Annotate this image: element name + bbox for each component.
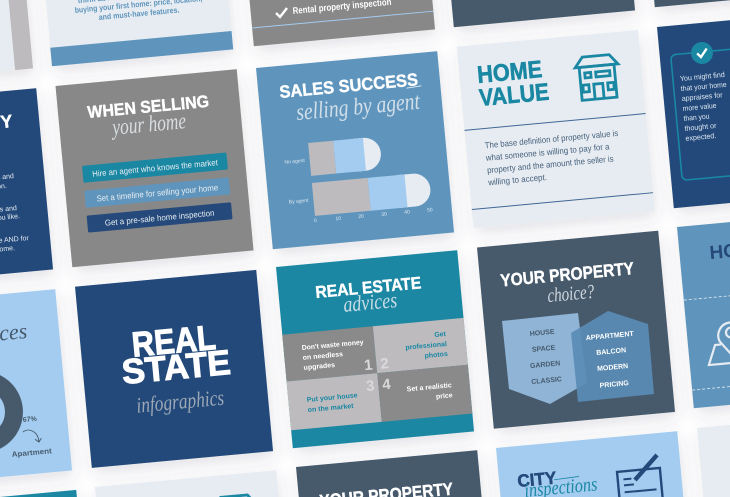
text block: appraisal: that your home <box>680 80 727 93</box>
house shape: right list: PRICING <box>599 380 630 390</box>
panel: top rental inspection card <box>237 0 435 46</box>
bar chart: 30 <box>381 212 387 218</box>
panel: right navy appraisal card <box>657 10 730 208</box>
bar chart: 0 <box>314 218 317 224</box>
house shape: right list: BALCON <box>596 347 626 357</box>
text: tip 1: Don't waste money <box>302 339 364 352</box>
text: tip 1 <box>302 339 366 372</box>
text block: appraisal: thought or <box>684 121 717 133</box>
panel: top cropped first-home card <box>35 0 233 66</box>
icon: house <box>574 54 621 101</box>
heading <box>476 56 550 112</box>
bar chart: No agent <box>284 158 306 166</box>
text block: first home advice: and must-have features. <box>98 6 180 22</box>
text: tip 1: upgrades <box>303 362 335 372</box>
button: pre-sale inspection: Get a pre-sale home inspection <box>104 208 215 228</box>
text block: appraisal: than you <box>683 112 710 123</box>
panel: home value <box>457 30 655 228</box>
icon: check badge <box>690 41 714 65</box>
button: set a timeline <box>84 177 230 208</box>
panel: bottom-right light card <box>697 411 730 497</box>
panel: top-right slate card <box>638 0 730 7</box>
title: STATE <box>120 343 232 392</box>
heading: REAL ESTATE <box>315 273 422 302</box>
label: 67%: 67% <box>22 416 38 424</box>
text block: appraisal: more value <box>682 101 717 113</box>
text: tip 2: Get <box>434 331 447 339</box>
text block: definition: what someone is willing to pay for a <box>485 141 610 163</box>
panel: your property choice <box>477 231 675 429</box>
bar chart: 10 <box>335 216 342 222</box>
panel: city inspections <box>496 431 694 497</box>
heading: SALES SUCCESS <box>278 69 419 102</box>
panel: top slate card <box>437 0 635 27</box>
bar chart: By agent <box>289 198 309 206</box>
house shape: left list: HOUSE <box>529 329 555 338</box>
numbers: 2 <box>380 355 390 373</box>
panel: real state infographics cover <box>75 270 273 468</box>
panel: right location card <box>677 210 730 408</box>
house shape: right list <box>569 307 655 402</box>
heading: CITY <box>517 467 558 491</box>
text: tip 3 <box>307 392 359 414</box>
script subtitle: infographics <box>135 385 225 418</box>
bar chart: 20 <box>358 214 364 220</box>
house shape: right list: MODERN <box>597 363 629 373</box>
text block: definition <box>483 128 622 187</box>
text: tip 4: Set a realistic <box>406 382 452 393</box>
button: hire an agent: Hire an agent who knows the market <box>92 157 219 179</box>
title: REAL <box>130 318 217 365</box>
arrow <box>23 429 42 443</box>
text block: appraisal: appraises for <box>681 90 723 103</box>
icon: house <box>213 494 259 497</box>
panel: bottom your property card <box>296 450 494 497</box>
numbers: 4 <box>382 376 392 394</box>
panel: sales success <box>256 51 454 249</box>
numbers: 1 <box>363 357 373 374</box>
text block: appraisal: You might find <box>679 70 725 83</box>
text: tip 3: Put your house <box>307 392 358 404</box>
heading: HOME <box>476 56 543 89</box>
text block: first home advice <box>73 0 204 24</box>
panel: top-left cropped card <box>0 0 33 85</box>
house shape: left list: CLASSIC <box>531 376 562 386</box>
text block: appraisal <box>679 70 730 143</box>
text: tip 2: professional <box>405 341 447 352</box>
bar chart: 50 <box>427 207 433 214</box>
text block: body fragments <box>0 172 31 256</box>
quadrant grid <box>282 318 472 430</box>
heading: YOUR PROPERTY <box>500 258 635 290</box>
button: set a timeline: Set a timeline for selling your home <box>96 182 219 203</box>
script subtitle: your home <box>110 108 187 140</box>
house shape: left list <box>502 313 589 408</box>
text block: appraisal: expected. <box>685 131 717 143</box>
label: apartment: Apartment <box>11 446 53 459</box>
text: tip 4 <box>406 382 453 403</box>
text: tip 3: on the market <box>307 403 355 414</box>
house shape: left list: GARDEN <box>530 360 561 370</box>
bar chart: 40 <box>404 209 410 216</box>
text block: definition: willing to accept. <box>487 172 547 187</box>
script subtitle: advices <box>342 287 398 317</box>
button: hire an agent <box>82 153 228 183</box>
title <box>118 317 232 392</box>
text block: definition: The base definition of property value is <box>484 128 619 150</box>
panel: left navy card <box>0 88 53 286</box>
icon: form with pen <box>616 455 663 497</box>
icon: check mark <box>276 8 288 17</box>
panel: left light-blue donut card <box>0 289 72 487</box>
script subtitle: choice? <box>546 281 595 307</box>
house shape: left list: SPACE <box>532 345 556 354</box>
numbers <box>363 355 392 395</box>
icon: map pin <box>705 318 730 365</box>
text: tip 4: price <box>436 392 453 401</box>
panel: bottom light card <box>95 470 293 497</box>
text block: definition: property and the amount the seller is <box>487 154 614 175</box>
panel: bottom-left teal card <box>0 490 93 497</box>
bar chart <box>283 132 433 226</box>
text: tip 2 <box>404 331 449 362</box>
text: tip 1: on needless <box>302 351 343 362</box>
donut chart <box>0 377 17 447</box>
text: tip 2: photos <box>424 351 448 360</box>
script subtitle: selling by agent <box>295 89 422 126</box>
house shape: right list: APPARTMENT <box>586 331 635 342</box>
panel: when selling your home <box>56 69 254 267</box>
panel: real estate advices <box>276 250 474 448</box>
heading: VALUE <box>478 79 550 112</box>
numbers: 3 <box>365 377 375 395</box>
heading: WHEN SELLING <box>87 92 210 122</box>
button: pre-sale inspection <box>87 202 233 233</box>
